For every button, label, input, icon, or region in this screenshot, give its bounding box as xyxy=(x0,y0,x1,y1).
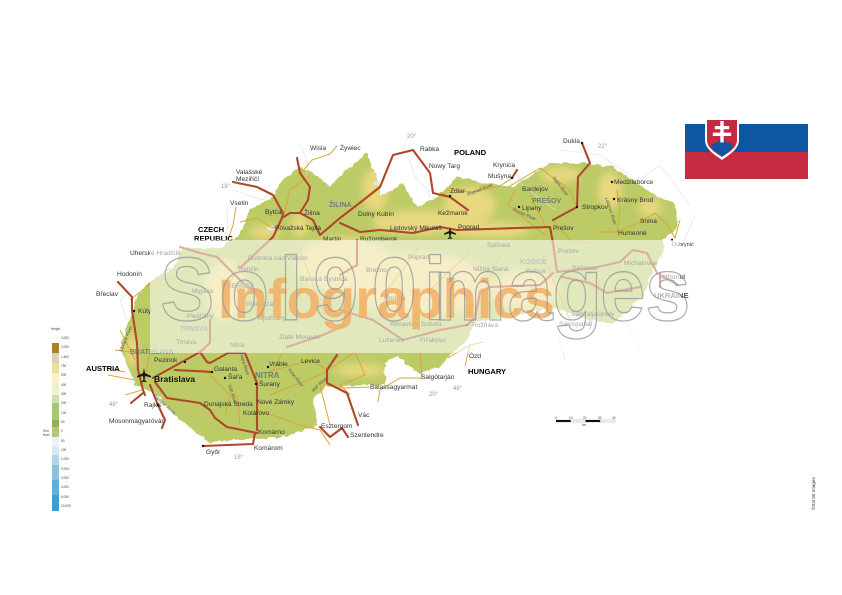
graticule labels xyxy=(109,134,608,461)
legend values: 1,000 xyxy=(61,457,69,461)
major roads xyxy=(118,143,678,446)
city labels: Lučenec xyxy=(379,337,405,344)
icon: airport Poprad xyxy=(444,227,456,239)
city labels: Poprad xyxy=(458,224,480,231)
city labels: Dolný Kubín xyxy=(358,211,394,218)
legend values: 1,500 xyxy=(61,355,69,359)
land fill xyxy=(120,153,677,443)
legend values: 2,000 xyxy=(61,467,69,471)
city labels: Kolárovo xyxy=(243,410,269,417)
city labels: Nižná Slaná xyxy=(473,266,509,273)
city labels: Spišská xyxy=(487,242,510,249)
sea level label: level xyxy=(43,433,50,437)
watermark: Sol90images: Sol90images xyxy=(160,239,690,340)
city labels: Michalovce xyxy=(624,260,657,267)
city labels: Esztergom xyxy=(321,423,353,430)
city labels: Vráble xyxy=(269,361,288,368)
city labels: Uherské Hradiště xyxy=(130,250,181,257)
region labels: BRATISLAVA xyxy=(130,349,174,356)
capital label: Bratislava: Bratislava xyxy=(154,374,195,384)
graticule labels: 20° xyxy=(429,392,439,398)
city labels: Kežmarok xyxy=(438,210,468,217)
country labels xyxy=(86,148,689,376)
city labels: Zlaté Moravce xyxy=(279,334,321,341)
city labels: Zdiar xyxy=(450,188,466,195)
river labels: Hron River xyxy=(287,368,305,388)
city labels: Hnúšťa xyxy=(384,295,406,302)
city labels: Brezno xyxy=(366,267,387,274)
river labels: Váh River xyxy=(227,384,238,405)
city labels: Krásny Brod xyxy=(617,197,654,204)
city labels: Nitra xyxy=(230,342,244,349)
flag of Slovakia xyxy=(685,118,808,179)
legend values: 300 xyxy=(61,392,67,396)
city labels: Břeclav xyxy=(96,291,119,298)
legend values: 10,000 xyxy=(61,504,71,508)
region labels: KOŠICE xyxy=(520,257,547,266)
legend values: 4,000 xyxy=(61,485,69,489)
city labels: Banská Bystrica xyxy=(300,276,348,283)
place labels xyxy=(86,134,694,461)
city labels: Prešov xyxy=(558,248,579,255)
city labels: Mosonmagyaróvár xyxy=(109,418,164,425)
city labels: Užhorod xyxy=(660,274,685,281)
city labels: Bytča xyxy=(265,209,282,216)
city labels: Ružomberok xyxy=(360,236,398,243)
city labels: Dubrynić xyxy=(672,242,694,248)
city markers xyxy=(133,142,673,447)
city labels xyxy=(96,138,694,456)
legend values xyxy=(61,336,71,508)
sea level label xyxy=(43,429,50,437)
city labels: Martin xyxy=(323,236,342,243)
legend colour bar xyxy=(52,343,59,511)
city labels: Komárom xyxy=(254,445,283,452)
graticule labels: 20° xyxy=(407,134,417,140)
legend values: 400 xyxy=(61,383,67,387)
scale bar: 40 xyxy=(612,416,616,420)
river labels: Poprad River xyxy=(467,182,494,197)
icon: coat of arms shield xyxy=(705,118,739,160)
country labels: AUSTRIA xyxy=(86,364,120,373)
city labels: Rabka xyxy=(420,146,439,153)
city labels: Trenčin xyxy=(237,266,259,273)
graticule labels: 22° xyxy=(598,144,608,150)
legend values: 750 xyxy=(61,364,67,368)
scale bar: 30 xyxy=(598,416,602,420)
city labels: Wisla xyxy=(310,145,326,152)
country labels: HUNGARY xyxy=(468,367,506,376)
city labels: Stropkov xyxy=(582,204,609,211)
country labels: REPUBLIC xyxy=(194,234,233,243)
city labels: Trnava xyxy=(176,339,197,346)
city labels: Sárospatak xyxy=(559,321,593,328)
legend values: 5,000 xyxy=(61,495,69,499)
city labels: Myjava xyxy=(192,288,213,295)
airport icons xyxy=(137,227,456,382)
river labels: Torysa River xyxy=(512,206,537,222)
river labels: Ipel' River xyxy=(310,375,329,393)
scale bar xyxy=(555,416,616,427)
city labels: Valašské xyxy=(236,169,263,176)
river labels: Nitra River xyxy=(239,354,251,376)
city labels: Šal'a xyxy=(228,372,243,381)
river labels: Danube River xyxy=(152,393,177,416)
legend: elevation scale xyxy=(43,327,71,511)
city labels: Hodonín xyxy=(117,271,142,278)
scale bar: 0 xyxy=(555,416,557,420)
city labels: Prešov xyxy=(553,225,574,232)
country labels: UKRAINE xyxy=(654,291,689,300)
region labels: TRENČÍN xyxy=(222,281,253,290)
city labels: Pezinok xyxy=(154,357,178,364)
minor roads xyxy=(106,146,680,445)
translucent band over map xyxy=(150,240,680,353)
legend values: 3,000 xyxy=(61,336,69,340)
city labels: Prievidza xyxy=(246,301,273,308)
river labels xyxy=(118,176,618,416)
legend values: 200 xyxy=(61,401,67,405)
watermark: Infographics: Infographics xyxy=(218,267,555,330)
city labels: Rožňava xyxy=(472,322,498,329)
region labels: TRNAVA xyxy=(180,326,208,333)
region labels: NITRA xyxy=(255,371,280,380)
city labels: Nowy Targ xyxy=(429,163,460,170)
rivers and lakes xyxy=(120,146,695,360)
city labels: Humenné xyxy=(618,230,647,237)
country labels: POLAND xyxy=(454,148,487,157)
legend values: 500 xyxy=(61,373,67,377)
scale bar: km xyxy=(582,423,587,427)
legend title: Height xyxy=(51,327,60,331)
city labels: Levice xyxy=(301,358,320,365)
city labels: Dubnica nad Váhom xyxy=(248,255,308,262)
graticule labels: 48° xyxy=(453,386,463,392)
map base: Slovakia relief xyxy=(120,153,677,443)
city labels: Medzilaborce xyxy=(614,179,654,186)
city labels: Piešt'any xyxy=(187,313,214,320)
river labels: Laborec River xyxy=(604,197,618,226)
graticule labels: 18° xyxy=(234,455,244,461)
scale bar: 20 xyxy=(583,416,587,420)
country labels: CZECH xyxy=(198,225,224,234)
city labels: Szentendre xyxy=(350,432,384,439)
mountain shading xyxy=(126,167,662,376)
city labels: Lipany xyxy=(522,205,542,212)
city labels: Liptovský Mikuláš xyxy=(390,225,442,232)
city labels: Mušyna xyxy=(488,173,511,180)
city labels: Topoľčany xyxy=(256,315,287,322)
city labels: Fil'akovo xyxy=(420,337,446,344)
city labels: Rimavská Sobota xyxy=(390,321,442,328)
city labels: Žilina xyxy=(304,208,320,217)
river labels: Morava River xyxy=(118,325,133,352)
copyright credit: ©Sol 90 Images xyxy=(810,477,816,510)
city labels: Kúty xyxy=(138,308,152,315)
sea level label: Sea xyxy=(43,429,49,433)
region labels: PREŠOV xyxy=(532,196,562,205)
city labels: Żywiec xyxy=(340,143,361,152)
city labels: Krynica xyxy=(493,162,515,169)
city labels: Sátoraljaújhely xyxy=(571,311,615,318)
city labels: Komárno xyxy=(258,429,285,436)
city labels: Šurany xyxy=(259,379,281,388)
legend values: 50 xyxy=(61,439,65,443)
scale bar: 10 xyxy=(569,416,573,420)
city labels: Meziříčí xyxy=(236,176,259,183)
city labels: Salgótarján xyxy=(421,374,455,381)
city labels: Balassagyarmat xyxy=(370,384,417,391)
city labels: Rajka xyxy=(144,402,161,409)
legend values: 0 xyxy=(61,429,63,433)
city labels: Snina xyxy=(640,218,657,225)
river labels: Topľa River xyxy=(551,176,570,197)
city labels: Bardejov xyxy=(522,186,549,193)
icon: airport Bratislava xyxy=(137,368,151,382)
graticule labels: 18° xyxy=(221,184,231,190)
city labels: Ózd xyxy=(469,351,481,360)
city labels: Dunajská Streda xyxy=(204,401,253,408)
city labels: Nové Zámky xyxy=(257,399,295,406)
city labels: Košice xyxy=(526,268,546,275)
legend values: 50 xyxy=(61,420,65,424)
legend values: 100 xyxy=(61,411,67,415)
city labels: Vác xyxy=(358,412,370,419)
legend values: 100 xyxy=(61,448,67,452)
region labels xyxy=(130,196,562,380)
city labels: Győr xyxy=(206,449,221,456)
city labels: Sečovce xyxy=(572,265,598,272)
graticule labels: 48° xyxy=(109,402,119,408)
legend values: 2,000 xyxy=(61,345,69,349)
city labels: Galanta xyxy=(214,366,237,373)
city labels: Poprad xyxy=(408,254,430,261)
region labels: ŽILINA xyxy=(329,200,352,209)
legend values: 3,000 xyxy=(61,476,69,480)
city labels: Považská Teplá xyxy=(275,225,321,232)
city labels: Vsetin xyxy=(230,200,249,207)
city labels: Dukla xyxy=(563,138,580,145)
